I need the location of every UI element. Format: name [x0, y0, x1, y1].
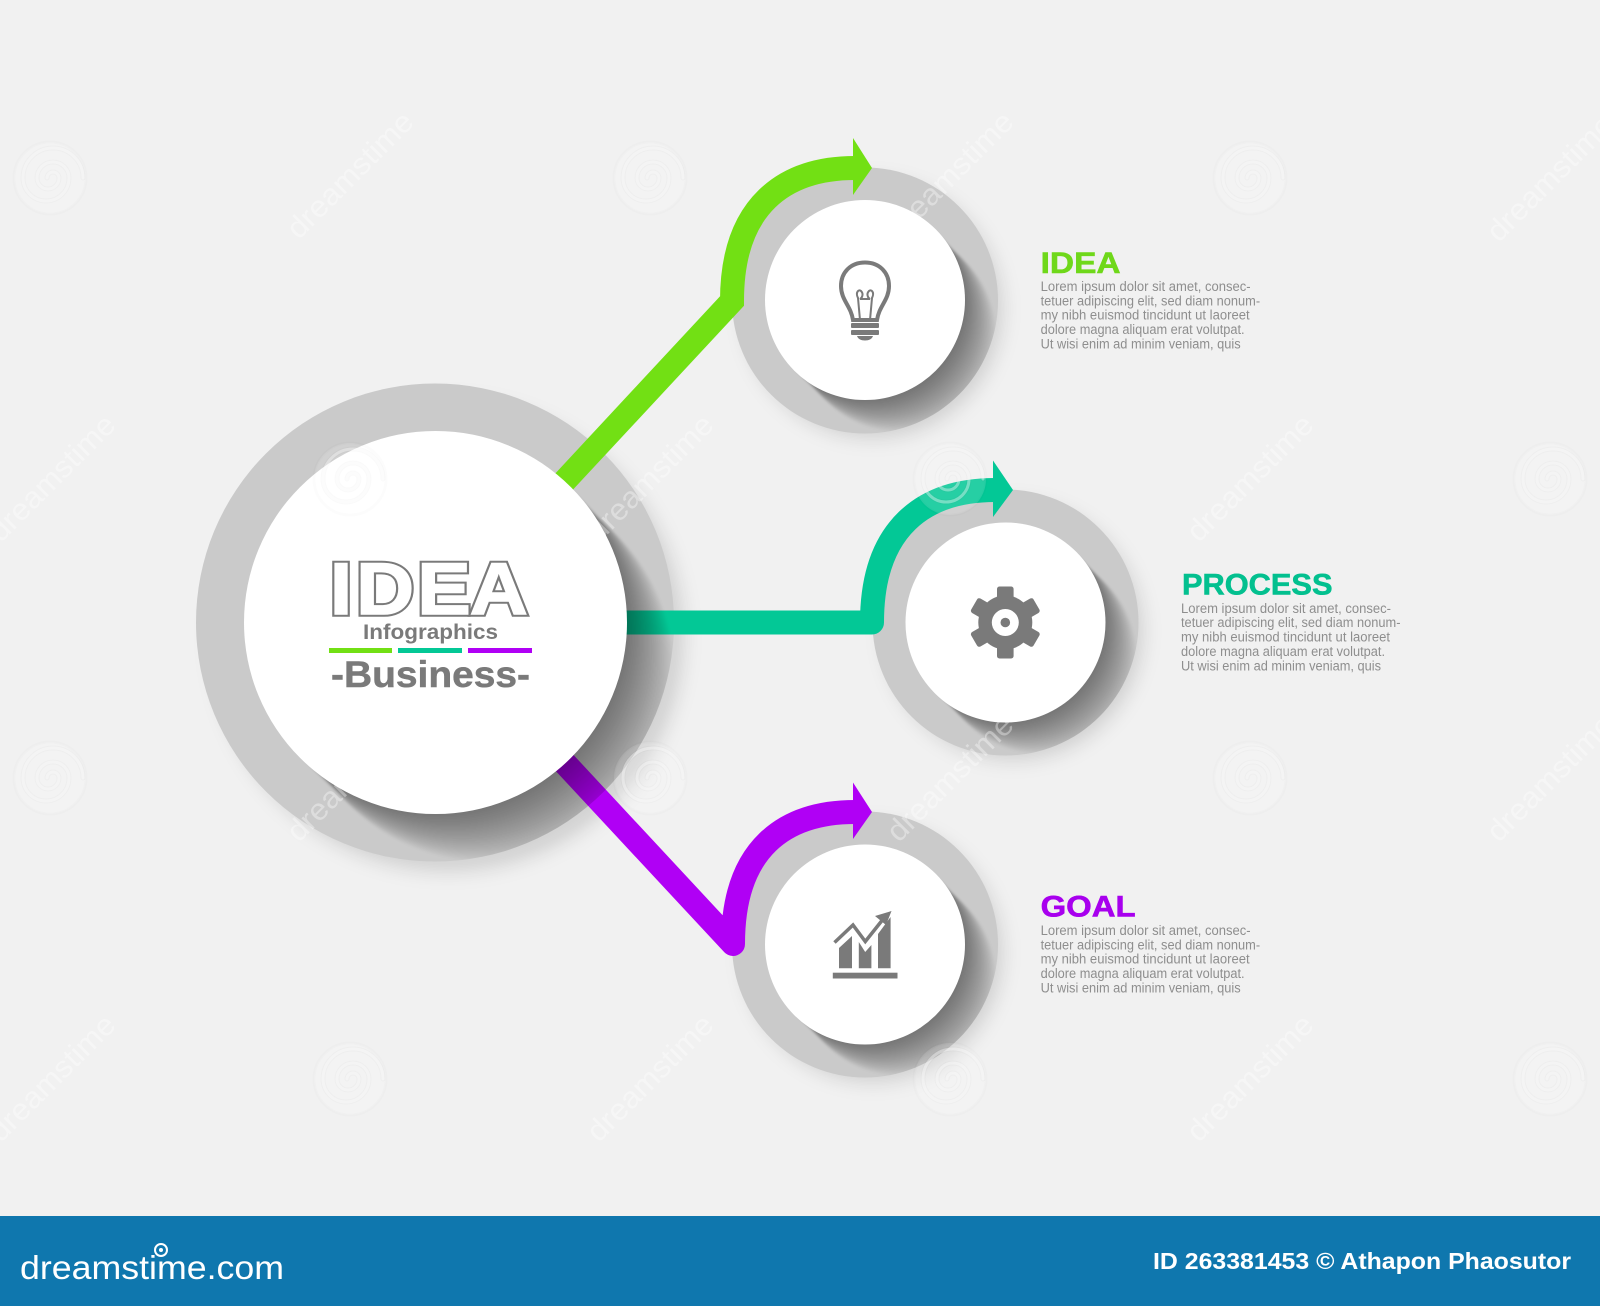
text block: process: tetuer adipiscing elit, sed diam nonum- [1181, 615, 1400, 630]
icon: gear [970, 586, 1041, 658]
panel: goal node [560, 758, 1003, 1083]
arrow: teal process arrow [620, 460, 1013, 622]
text block: process: Lorem ipsum dolor sit amet, consec- [1181, 601, 1391, 616]
text block: goal: Ut wisi enim ad minim veniam, quis [1041, 980, 1241, 996]
subtitle: Business: -Business- [331, 654, 530, 695]
text block: idea: my nibh euismod tincidunt ut laoreet [1041, 308, 1250, 323]
arrow: green idea arrow [560, 138, 872, 486]
text block: idea: dolore magna aliquam erat volutpat. [1041, 322, 1245, 337]
panel: central circle [244, 431, 674, 860]
text block: process: PROCESS [1182, 568, 1332, 601]
text block: idea: Lorem ipsum dolor sit amet, consec- [1041, 279, 1251, 294]
text block: goal: GOAL [1041, 891, 1136, 924]
watermark pattern [0, 105, 1600, 1148]
footer logo: dreamstime.com [20, 1249, 284, 1286]
divider: three colour bars [329, 648, 532, 653]
text block: goal [1041, 891, 1260, 996]
text block: process: dolore magna aliquam erat volutpat. [1181, 644, 1385, 659]
icon: light bulb [841, 262, 889, 340]
footer bar [0, 1216, 1600, 1306]
panel: idea node [560, 138, 1003, 486]
text block: goal: tetuer adipiscing elit, sed diam nonum- [1041, 937, 1260, 952]
text block: goal: dolore magna aliquam erat volutpat. [1041, 966, 1245, 981]
text block: idea: IDEA [1041, 247, 1121, 280]
text block: idea: Ut wisi enim ad minim veniam, quis [1041, 336, 1241, 352]
text block: idea [1041, 247, 1260, 352]
text block: process [1181, 568, 1400, 673]
text block: process: Ut wisi enim ad minim veniam, quis [1181, 658, 1381, 673]
arrow: purple goal arrow [560, 758, 872, 944]
panel: process node [620, 460, 1144, 761]
text block: process: my nibh euismod tincidunt ut laoreet [1181, 630, 1390, 644]
title: outlined IDEA: IDEA [330, 549, 528, 630]
text block: idea: tetuer adipiscing elit, sed diam nonum- [1041, 293, 1260, 308]
footer credit: ID 263381453 © Athapon Phaosutor [1153, 1248, 1571, 1274]
central circle ring [196, 384, 684, 872]
subtitle: Infographics: Infographics [363, 621, 498, 644]
text block: goal: Lorem ipsum dolor sit amet, consec- [1041, 923, 1251, 938]
icon: growth chart [833, 911, 898, 978]
title: outlined IDEA: IDEA [330, 549, 528, 630]
text block: goal: my nibh euismod tincidunt ut laoreet [1041, 952, 1250, 967]
